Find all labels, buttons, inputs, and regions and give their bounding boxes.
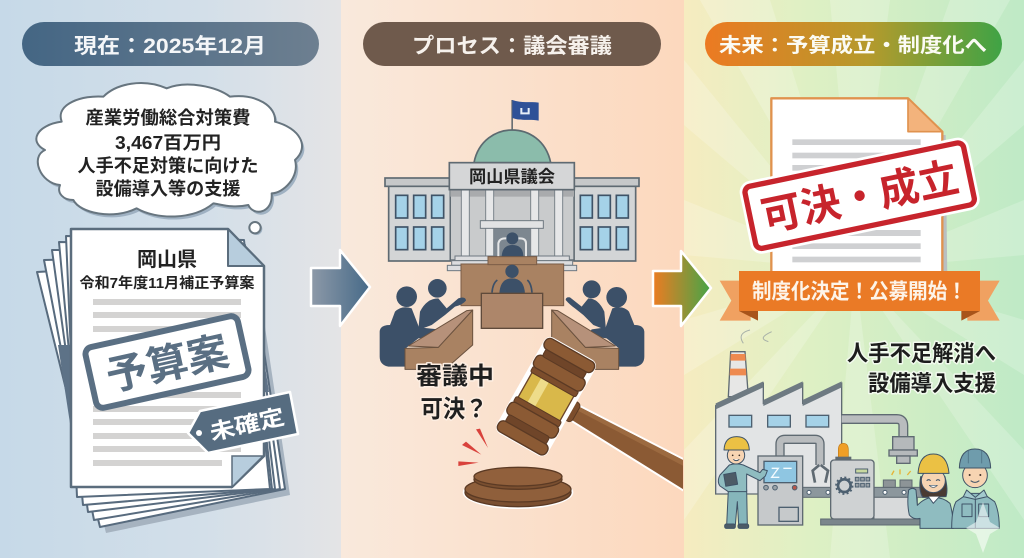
worker: man in blue helmet — [952, 449, 999, 528]
label: resolving labor shortage: 設備導入支援 — [868, 371, 996, 396]
approved document — [720, 98, 1000, 321]
press tool — [889, 437, 917, 463]
cloud text: 3,467百万円 — [115, 133, 221, 153]
portico — [450, 189, 574, 260]
heading: process: プロセス：議会審議 — [412, 35, 612, 58]
handle — [571, 405, 683, 492]
pipes — [780, 419, 903, 465]
panel: future background — [684, 0, 1024, 558]
thought cloud — [36, 83, 304, 235]
main document sheet — [71, 229, 264, 487]
control console — [758, 456, 803, 525]
arrow: current to process — [311, 250, 370, 326]
flag — [511, 100, 539, 130]
desks — [405, 310, 619, 369]
rostrum — [461, 257, 564, 328]
cloud text: 産業労働総合対策費 — [86, 108, 251, 128]
gripper — [813, 465, 828, 483]
label: resolving labor shortage — [847, 341, 996, 396]
gavel sound block — [463, 467, 573, 509]
heading: future — [705, 22, 1002, 66]
heading: future: 未来：予算成立・制度化へ — [719, 33, 987, 57]
assembly members: right — [566, 280, 644, 367]
stamp: approved: 可決・成立 — [757, 154, 963, 240]
label: under deliberation: 可決？ — [420, 396, 488, 423]
assembly members: left — [380, 279, 466, 367]
gavel — [496, 337, 683, 492]
heading: process — [363, 22, 661, 66]
arrow: process to future — [653, 251, 711, 326]
label: resolving labor shortage: 人手不足解消へ — [847, 341, 996, 366]
label: under deliberation — [416, 363, 494, 423]
ribbon: institutionalization decided: 制度化決定！公募開始！ — [752, 280, 967, 303]
worker: man with clipboard — [718, 437, 767, 528]
document subtitle: 令和7年度11月補正予算案 — [80, 274, 255, 292]
document stack: budget draft — [37, 229, 298, 533]
tag: unconfirmed: 未確定 — [207, 404, 287, 445]
cloud text: 人手不足対策に向けた — [78, 156, 258, 176]
speaker chair and silhouette — [498, 232, 526, 257]
conveyor — [802, 469, 930, 525]
factory body — [716, 381, 842, 494]
wings — [389, 185, 450, 261]
panel: process background — [341, 0, 684, 558]
assembly name: 岡山県議会 — [469, 167, 556, 187]
tag: unconfirmed — [188, 392, 298, 453]
watermark sparkle — [966, 502, 1000, 553]
stamp: budget draft: 予算案 — [102, 328, 233, 400]
label: under deliberation: 審議中 — [416, 363, 494, 390]
cloud text: 設備導入等の支援 — [96, 178, 240, 199]
ribbon: institutionalization decided — [720, 271, 1000, 321]
main machine — [831, 443, 874, 519]
head — [493, 334, 599, 459]
worker: woman — [908, 454, 953, 528]
document title: 岡山県 — [137, 248, 197, 271]
heading: current — [22, 22, 319, 66]
factory illustration — [716, 330, 930, 525]
building: prefectural assembly — [385, 100, 639, 328]
panel: current status background — [0, 0, 341, 558]
heading: current: 現在：2025年12月 — [74, 35, 266, 58]
stamp: budget draft — [84, 315, 250, 409]
chimney — [728, 352, 748, 397]
impact sparks — [458, 429, 488, 466]
cloud text — [78, 108, 258, 199]
